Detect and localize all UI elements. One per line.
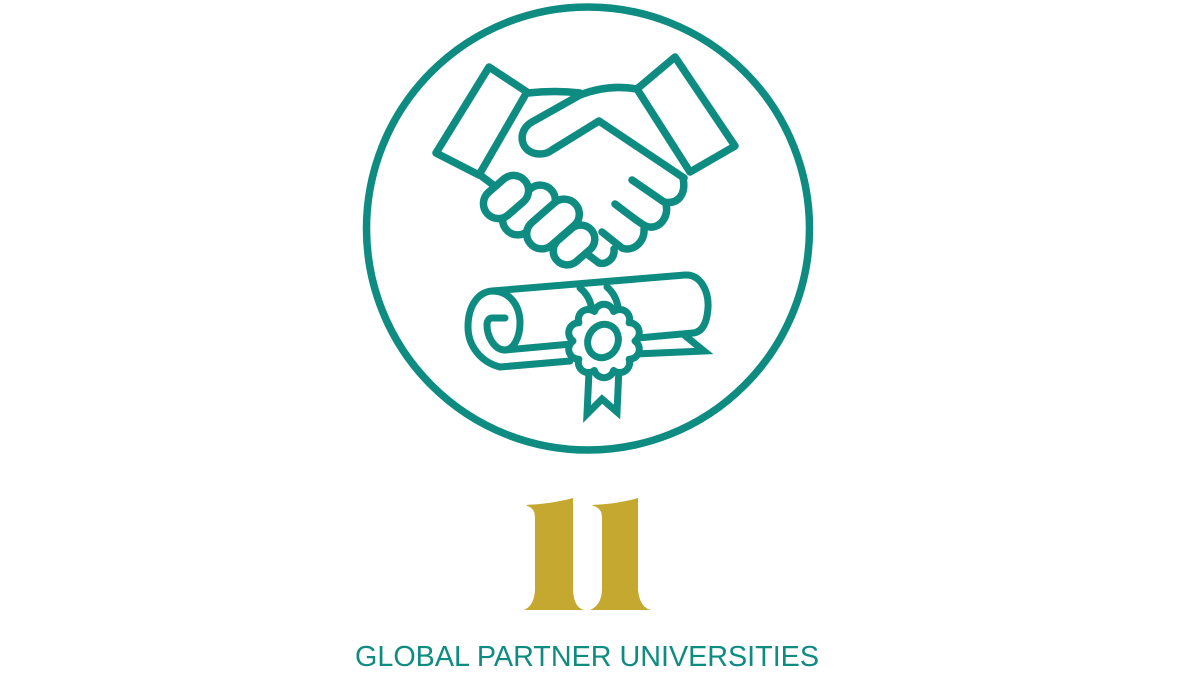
- right hand fingers: [632, 178, 684, 202]
- scroll tail: [635, 334, 704, 354]
- seal ring: [582, 319, 624, 363]
- gear seal: [569, 304, 639, 378]
- right cuff: [637, 57, 735, 172]
- left hand fingers: [477, 169, 601, 271]
- icon: handshake: [436, 57, 735, 271]
- infographic: [356, 3, 818, 666]
- caption: GLOBAL PARTNER UNIVERSITIES: [355, 641, 819, 673]
- ribbon: [587, 368, 619, 414]
- left wrist: [480, 175, 492, 184]
- left hand top edge: [528, 92, 580, 93]
- right hand with thumb: [522, 87, 684, 178]
- left cuff: [436, 67, 527, 175]
- icon circle: [366, 7, 810, 450]
- scroll body: [492, 275, 708, 350]
- scroll left roll: [468, 291, 570, 367]
- number: 11: 11: [512, 462, 662, 646]
- seal band: [580, 287, 618, 310]
- icon: diploma scroll: [468, 275, 708, 414]
